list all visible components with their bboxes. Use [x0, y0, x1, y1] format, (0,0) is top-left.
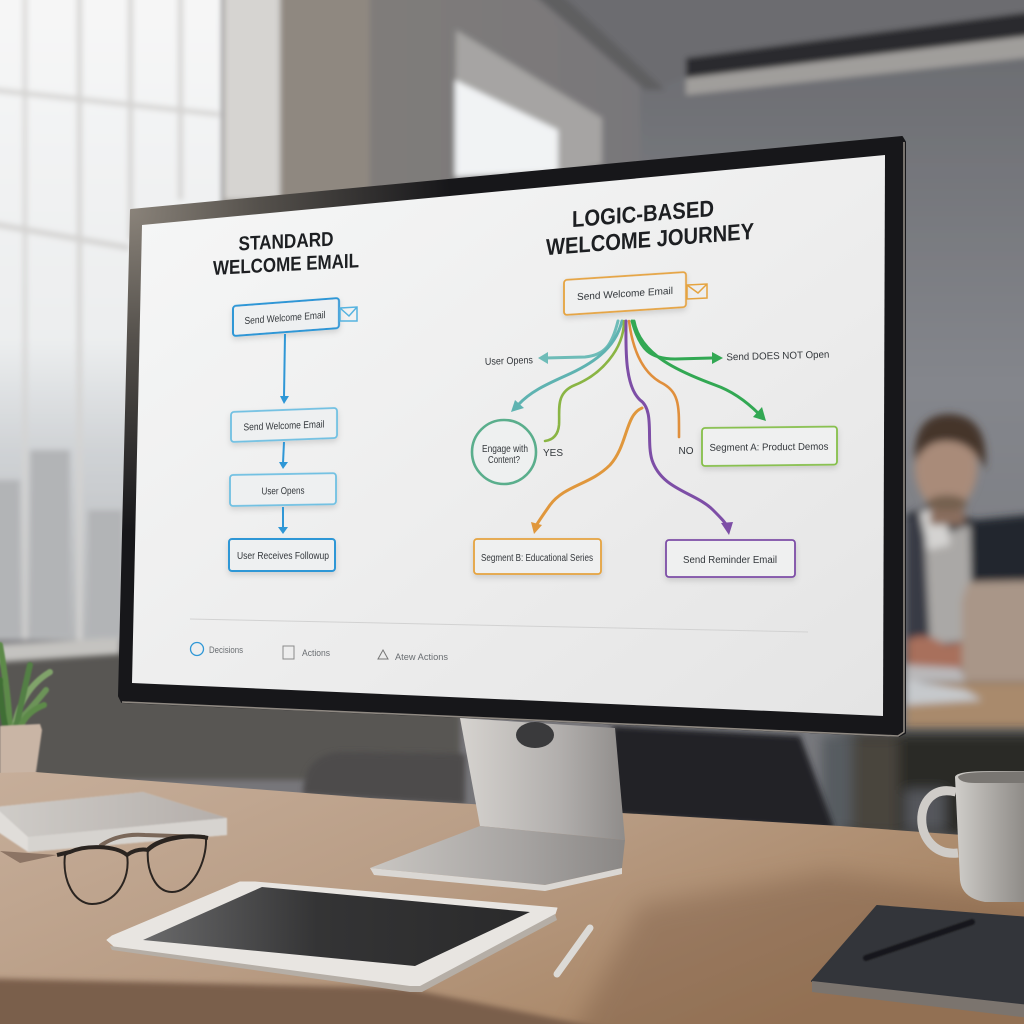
left lens — [65, 847, 128, 904]
arrow: to send reminder — [626, 321, 733, 535]
label: send does not open: Send DOES NOT Open — [726, 350, 830, 363]
notebook and pen — [812, 906, 1024, 1018]
right title: LOGIC-BASED — [572, 195, 714, 232]
monitor — [119, 137, 905, 736]
icon: glasses — [0, 835, 208, 904]
decision: engage with content: Content? — [488, 455, 520, 466]
decision: engage with content: Engage with — [482, 444, 528, 455]
arrow: left 2 — [279, 442, 288, 469]
left title: WELCOME EMAIL — [213, 250, 359, 280]
arrow: to yes — [545, 321, 624, 441]
label: no: NO — [678, 446, 694, 457]
arrow: to send does not open — [632, 321, 723, 364]
label: user opens: User Opens — [485, 355, 533, 368]
coffee mug — [922, 771, 1024, 902]
left title: STANDARD — [238, 229, 334, 255]
left box: send welcome email 2 — [231, 408, 337, 442]
left box: user opens: User Opens — [261, 486, 304, 497]
plant pot — [0, 724, 42, 803]
arrow: to no — [629, 321, 679, 437]
monitor stand — [370, 718, 625, 891]
arrow: left 1 — [280, 334, 289, 404]
plant — [0, 645, 50, 803]
legend: actions: Actions — [302, 648, 330, 659]
far temple — [100, 835, 205, 846]
monitor bezel — [119, 137, 905, 736]
legend: actions — [283, 646, 330, 659]
tablet — [107, 882, 557, 992]
arrow: left 3 — [278, 507, 288, 534]
left title — [213, 227, 359, 280]
decision: engage with content — [472, 420, 536, 484]
near temple — [0, 851, 57, 863]
arrow: to segment b — [531, 408, 642, 534]
left box: send welcome email — [233, 298, 339, 336]
icon: envelope blue — [340, 307, 357, 321]
stylus — [557, 928, 590, 974]
box: segment b — [474, 539, 601, 574]
monitor edge highlight — [122, 142, 904, 736]
label: yes: YES — [543, 448, 563, 459]
legend: decisions: Decisions — [209, 645, 243, 655]
book on desk — [0, 792, 227, 852]
right box: send welcome email: Send Welcome Email — [577, 286, 673, 303]
desk — [0, 772, 1024, 1024]
branching arrows — [511, 321, 766, 535]
box: segment a: Segment A: Product Demos — [710, 442, 829, 454]
seated person in background — [822, 414, 1024, 837]
upper rims and bridge — [57, 836, 208, 855]
left box: user opens — [230, 473, 336, 506]
chair and dark items behind monitor — [303, 726, 835, 830]
left box: send welcome email 2: Send Welcome Email — [243, 419, 324, 434]
arrow: to segment a — [634, 321, 766, 421]
right box: send welcome email — [564, 272, 686, 315]
legend — [190, 642, 448, 663]
right lens — [148, 835, 206, 892]
left box: send welcome email: Send Welcome Email — [244, 310, 326, 327]
monitor screen — [132, 155, 885, 716]
right title — [546, 192, 754, 260]
legend: decisions — [190, 642, 243, 656]
arrow: to engage decision — [511, 321, 622, 412]
window — [0, 0, 222, 664]
box: send reminder email: Send Reminder Email — [683, 555, 777, 566]
box: segment a — [702, 427, 837, 466]
box: send reminder email — [666, 540, 795, 577]
legend: new actions: Atew Actions — [395, 652, 448, 663]
left box: user receives followup: User Receives Followup — [237, 551, 329, 562]
right title: WELCOME JOURNEY — [546, 218, 754, 260]
arrow: to user opens — [538, 321, 618, 364]
legend: new actions — [378, 650, 448, 663]
left box: user receives followup — [229, 539, 335, 571]
icon: envelope orange — [687, 284, 707, 299]
box: segment b: Segment B: Educational Series — [481, 553, 593, 564]
